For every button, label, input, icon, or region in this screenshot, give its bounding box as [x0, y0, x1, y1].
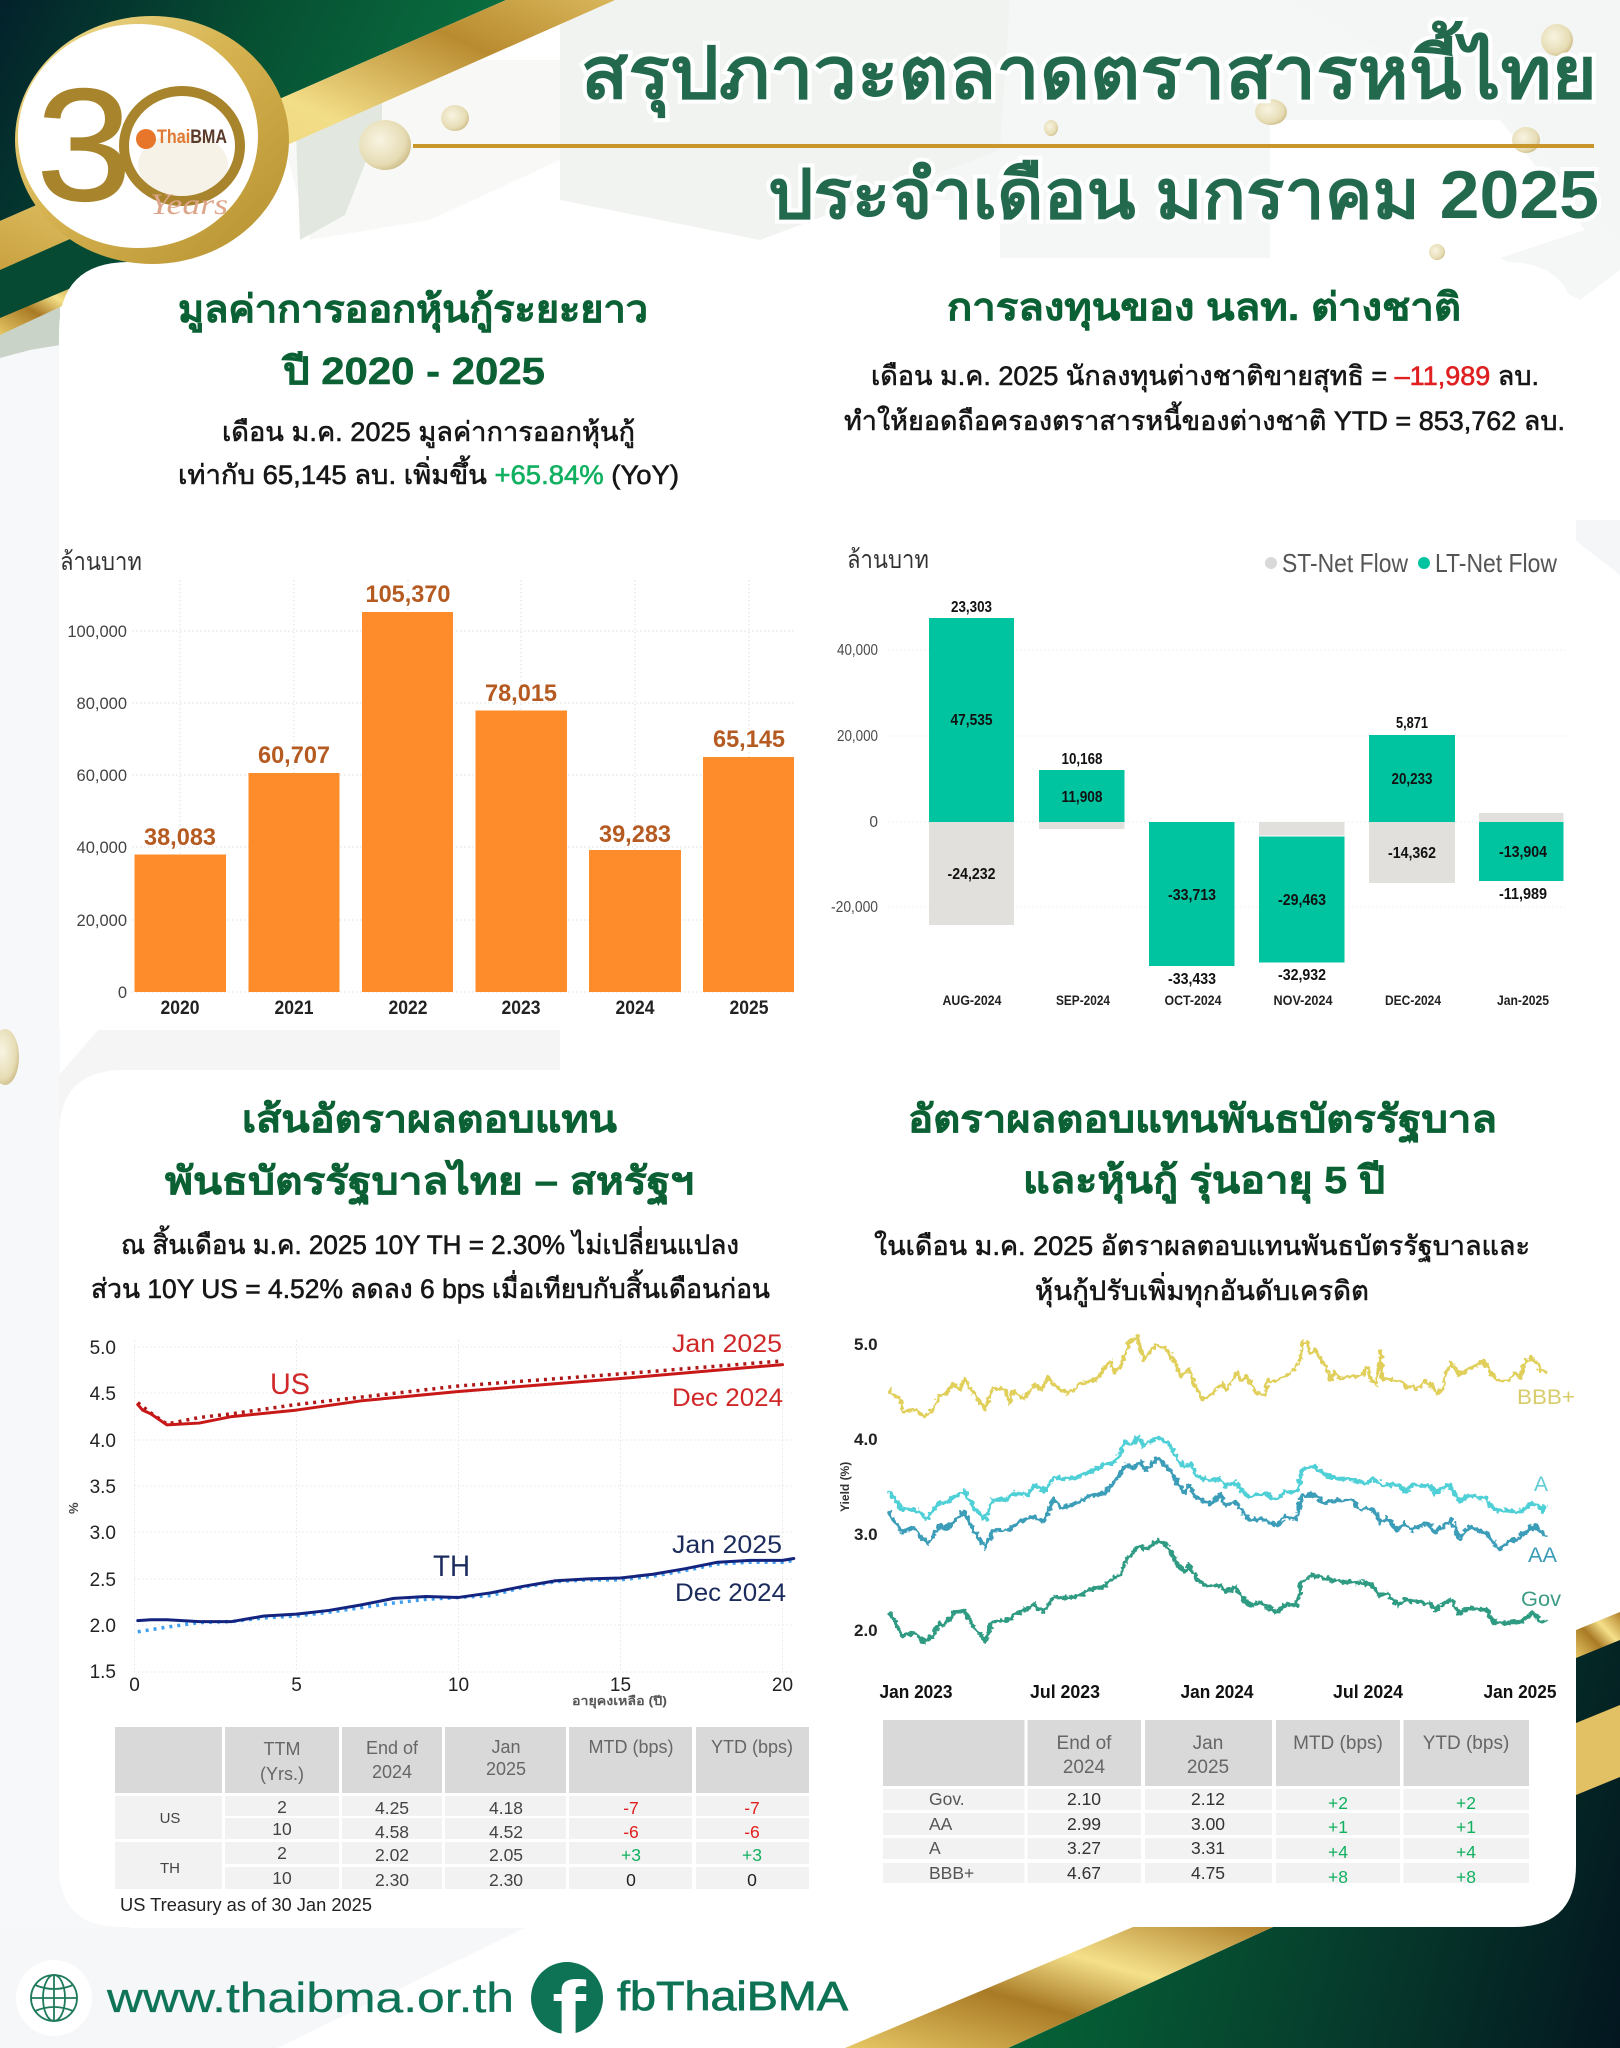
heading line 2: พันธบัตรรัฐบาลไทย – สหรัฐฯ: [165, 1159, 694, 1206]
y axis labels: 3.0: [854, 1525, 878, 1544]
x axis labels: NOV-2024: [1274, 993, 1333, 1008]
data labels: -14,362: [1388, 845, 1436, 862]
title line 1: สรุปภาวะตลาดตราสารหนี้ไทย: [581, 20, 1597, 119]
value labels: 65,145: [713, 726, 785, 753]
y axis labels: 40,000: [77, 839, 127, 857]
table rows: 2.99: [1067, 1814, 1101, 1834]
x axis labels: 2022: [388, 998, 428, 1019]
table rows: 2: [277, 1843, 287, 1863]
x axis labels: Jan-2025: [1497, 993, 1549, 1008]
corner decoration: bottom-right green and gold: [845, 1612, 1620, 2048]
y axis labels: 2.0: [90, 1616, 116, 1637]
series labels: [270, 1330, 786, 1607]
table header: YTD (bps): [711, 1737, 793, 1757]
panel: upper white card: [59, 262, 1576, 1030]
unit label: ล้านบาท: [60, 548, 142, 576]
table header: (Yrs.): [260, 1764, 304, 1784]
table header: MTD (bps): [1293, 1733, 1383, 1754]
series labels: Jan 2025: [672, 1330, 782, 1358]
table: yield curve: [115, 1727, 809, 1915]
x axis labels: [129, 1675, 793, 1696]
y axis labels: 2.0: [854, 1621, 878, 1640]
heading: มูลค่าการออกหุ้นกู้ระยะยาว: [178, 289, 648, 333]
table rows: TH: [160, 1860, 180, 1877]
heading line 2: และหุ้นกู้ รุ่นอายุ 5 ปี: [1023, 1160, 1385, 1204]
y axis labels: 1.5: [90, 1662, 116, 1683]
y axis labels: 40,000: [837, 642, 878, 659]
body line 2: ส่วน 10Y US = 4.52% ลดลง 6 bps เมื่อเทียบกับสิ้นเดือนก่อน: [91, 1269, 770, 1304]
x axis title: อายุคงเหลือ (ปี): [572, 1694, 667, 1709]
y axis labels: 4.5: [90, 1384, 116, 1405]
table rows: 4.25: [375, 1798, 409, 1818]
x axis labels: Jul 2024: [1333, 1682, 1403, 1702]
decorative gold pearls: [0, 24, 1573, 1085]
facebook handle: fbThaiBMA: [617, 1973, 849, 2019]
table rows: +3: [742, 1845, 762, 1865]
data labels: -11,989: [1499, 886, 1547, 903]
x axis labels: 5: [291, 1675, 302, 1696]
y axis labels: 3.5: [90, 1477, 116, 1498]
table rows: 2.02: [375, 1845, 409, 1865]
data labels: -24,232: [948, 866, 996, 883]
line: TH Dec 2024 dotted: [138, 1560, 794, 1632]
LT net flow bars: [929, 618, 1564, 966]
logo: ThaiBMA 30 years: 3: [36, 55, 132, 234]
heading: การลงทุนของ นลท. ต่างชาติ: [947, 287, 1461, 331]
table rows: 2: [277, 1797, 287, 1817]
x axis labels: DEC-2024: [1385, 993, 1441, 1008]
x axis labels: 2021: [274, 998, 314, 1019]
value labels: 39,283: [599, 821, 671, 848]
data labels: -29,463: [1278, 892, 1326, 909]
unit label: ล้านบาท: [847, 546, 929, 574]
table rows: [929, 1789, 1476, 1887]
table rows: -6: [744, 1822, 760, 1842]
icon: facebook: [531, 1962, 603, 2048]
x axis labels: Jan 2024: [1180, 1682, 1254, 1702]
value labels: 78,015: [485, 680, 557, 707]
y axis labels: 2.5: [90, 1570, 116, 1591]
table rows: 2.12: [1191, 1789, 1225, 1809]
table rows: 10: [272, 1868, 292, 1888]
table rows: -7: [744, 1798, 760, 1818]
line: AA: [890, 1458, 1545, 1549]
value labels: 38,083: [144, 824, 216, 851]
data labels: -13,904: [1499, 844, 1547, 861]
table note: US Treasury as of 30 Jan 2025: [120, 1895, 372, 1915]
table header: 2024: [1063, 1757, 1106, 1778]
y axis labels: [831, 642, 878, 916]
y axis labels: 20,000: [77, 912, 127, 930]
x axis labels: 2025: [730, 998, 769, 1019]
table header: TTM: [264, 1739, 300, 1759]
body line 1: ในเดือน ม.ค. 2025 อัตราผลตอบแทนพันธบัตรรัฐบาลและ: [874, 1230, 1530, 1262]
table: 5 year yields: [883, 1720, 1529, 1887]
series labels: Dec 2024: [672, 1384, 783, 1412]
table rows: [160, 1797, 762, 1890]
x axis labels: OCT-2024: [1164, 993, 1222, 1008]
x axis labels: [880, 1682, 1556, 1702]
panel: lower white card: [59, 1070, 1576, 1927]
table rows: 3.27: [1067, 1838, 1101, 1858]
series labels: A: [1534, 1473, 1548, 1496]
table rows: 10: [272, 1819, 292, 1839]
line chart: yield curve TH vs US: [66, 1330, 794, 1709]
legend: [1265, 548, 1557, 578]
table rows: 4.58: [375, 1822, 409, 1842]
y axis labels: 4.0: [90, 1431, 116, 1452]
panel: 5 year yield text: [874, 1099, 1530, 1308]
y axis labels: 4.0: [854, 1430, 878, 1449]
table header: MTD (bps): [588, 1737, 674, 1757]
table rows: BBB+: [929, 1863, 974, 1883]
table rows: 4.52: [489, 1822, 523, 1842]
table rows: 4.67: [1067, 1863, 1101, 1883]
x axis labels: 0: [129, 1675, 140, 1696]
data labels: 5,871: [1396, 715, 1428, 732]
data labels: 47,535: [950, 712, 993, 729]
stacked bar chart: foreign net flow: [831, 546, 1565, 1008]
series labels: Gov: [1521, 1588, 1562, 1611]
title: [413, 20, 1599, 233]
corner decoration: top-left green and gold: [0, 0, 615, 335]
value labels: [144, 581, 785, 851]
table rows: 3.00: [1191, 1814, 1225, 1834]
x axis labels: AUG-2024: [942, 993, 1002, 1008]
table rows: 2.30: [489, 1870, 523, 1890]
table rows: US: [160, 1810, 180, 1827]
x axis labels: 20: [772, 1675, 793, 1696]
website: www.thaibma.or.th: [106, 1974, 514, 2021]
table rows: 2.30: [375, 1870, 409, 1890]
panel: foreign investment text: [844, 287, 1565, 436]
x axis labels: 2023: [502, 998, 540, 1019]
logo: ThaiBMA 30 years: [15, 16, 289, 264]
data labels: -33,713: [1168, 887, 1216, 904]
table rows: 2.05: [489, 1845, 523, 1865]
body line 1: เดือน ม.ค. 2025 นักลงทุนต่างชาติขายสุทธิ = –11,989 ลบ.: [871, 361, 1539, 393]
data labels: 23,303: [951, 599, 992, 616]
title rule: [413, 144, 1594, 148]
table rows: 4.75: [1191, 1863, 1225, 1883]
y axis labels: 0: [869, 814, 878, 831]
series labels: TH: [433, 1550, 470, 1583]
table rows: 0: [626, 1870, 636, 1890]
table header: Jan: [491, 1737, 521, 1757]
x axis labels: [942, 993, 1549, 1008]
y axis labels: 0: [118, 984, 127, 1002]
table header: Jan: [1193, 1733, 1223, 1754]
table rows: 4.18: [489, 1798, 523, 1818]
table rows: AA: [929, 1814, 953, 1834]
y axis labels: [90, 1338, 116, 1683]
y axis labels: 80,000: [77, 695, 127, 713]
body line 2: หุ้นกู้ปรับเพิ่มทุกอันดับเครดิต: [1035, 1272, 1369, 1308]
data labels: -33,433: [1168, 971, 1216, 988]
table header: 2025: [1187, 1757, 1229, 1778]
x axis labels: 2020: [160, 998, 200, 1019]
table header: YTD (bps): [1423, 1733, 1509, 1754]
y axis labels: [854, 1335, 878, 1640]
table rows: Gov.: [929, 1789, 965, 1809]
line chart: 5 year yields: [838, 1335, 1575, 1702]
data labels: 10,168: [1062, 751, 1103, 768]
table header: [1057, 1733, 1509, 1778]
table rows: 2.10: [1067, 1789, 1101, 1809]
table rows: +8: [1328, 1867, 1348, 1887]
y axis labels: 3.0: [90, 1523, 116, 1544]
table rows: A: [929, 1838, 941, 1858]
series labels: Jan 2025: [672, 1531, 782, 1559]
heading line 1: อัตราผลตอบแทนพันธบัตรรัฐบาล: [908, 1099, 1497, 1144]
panel: yield curve text: [91, 1099, 770, 1304]
line: US Jan 2025 solid: [138, 1365, 783, 1425]
x axis labels: 10: [448, 1675, 469, 1696]
table header: 2024: [372, 1762, 412, 1782]
ST net flow bars: [929, 813, 1564, 925]
x axis labels: SEP-2024: [1056, 993, 1110, 1008]
series labels: [1517, 1386, 1575, 1611]
body line 1: ณ สิ้นเดือน ม.ค. 2025 10Y TH = 2.30% ไม่เปลี่ยนแปลง: [121, 1225, 739, 1260]
x axis labels: 2024: [616, 998, 655, 1019]
table rows: +2: [1328, 1793, 1348, 1813]
line: A: [890, 1436, 1545, 1519]
x axis labels: Jan 2023: [880, 1682, 952, 1702]
line: BBB+: [890, 1336, 1545, 1416]
line: TH Jan 2025 solid: [138, 1558, 794, 1622]
table rows: -7: [623, 1798, 639, 1818]
logo: ThaiBMA 30 years: Years: [150, 188, 228, 221]
y axis title: Yield (%): [838, 1462, 852, 1512]
x axis labels: Jul 2023: [1030, 1682, 1100, 1702]
legend: LT-Net Flow: [1435, 548, 1557, 578]
table rows: +8: [1456, 1867, 1476, 1887]
x axis labels: Jan 2025: [1484, 1682, 1556, 1702]
table rows: +4: [1328, 1842, 1348, 1862]
table rows: +4: [1456, 1842, 1476, 1862]
table rows: +2: [1456, 1793, 1476, 1813]
data labels: 20,233: [1392, 771, 1433, 788]
y axis labels: 5.0: [854, 1335, 878, 1354]
y axis labels: -20,000: [831, 899, 878, 916]
y axis labels: 5.0: [90, 1338, 116, 1359]
series labels: AA: [1528, 1544, 1557, 1567]
table header: End of: [366, 1738, 419, 1758]
body line 2: ทำให้ยอดถือครองตราสารหนี้ของต่างชาติ YTD = 853,762 ลบ.: [844, 401, 1565, 436]
table header: [260, 1737, 793, 1784]
y axis labels: [67, 623, 127, 1002]
table rows: +1: [1456, 1817, 1476, 1837]
series labels: US: [270, 1368, 310, 1401]
legend: ST-Net Flow: [1282, 548, 1408, 578]
icon: globe: [31, 1975, 77, 2021]
value labels: 105,370: [366, 581, 450, 608]
series labels: Dec 2024: [675, 1579, 786, 1607]
data labels: 11,908: [1062, 789, 1103, 806]
value labels: 60,707: [258, 742, 330, 769]
y axis labels: 100,000: [67, 623, 127, 641]
data labels: [948, 599, 1547, 988]
logo: ThaiBMA 30 years: ThaiBMA: [157, 127, 227, 148]
table header: 2025: [486, 1759, 526, 1779]
table rows: 3.31: [1191, 1838, 1225, 1858]
table rows: -6: [623, 1822, 639, 1842]
x axis labels: [160, 998, 769, 1019]
heading line 1: เส้นอัตราผลตอบแทน: [242, 1099, 617, 1141]
line: Gov: [890, 1540, 1545, 1642]
title line 2: ประจำเดือน มกราคม 2025: [768, 157, 1599, 233]
table rows: +3: [621, 1845, 641, 1865]
bars: [134, 612, 794, 992]
y axis title: %: [66, 1502, 81, 1514]
line: US Dec 2024 dotted: [138, 1361, 783, 1424]
heading year range: ปี 2020 - 2025: [281, 351, 545, 393]
panel: bond issuance text: [178, 289, 679, 490]
table header: End of: [1057, 1733, 1112, 1754]
x axis labels: 15: [610, 1675, 631, 1696]
table rows: +1: [1328, 1817, 1348, 1837]
bar chart: issuance value: [60, 548, 794, 1019]
body line 1: เดือน ม.ค. 2025 มูลค่าการออกหุ้นกู้: [222, 417, 635, 449]
data labels: -32,932: [1278, 967, 1326, 984]
table rows: 0: [747, 1870, 757, 1890]
series labels: BBB+: [1517, 1386, 1575, 1409]
body line 2: เท่ากับ 65,145 ลบ. เพิ่มขึ้น +65.84% (YoY): [178, 455, 679, 490]
y axis labels: 20,000: [837, 728, 878, 745]
footer: [31, 1962, 849, 2048]
y axis labels: 60,000: [77, 767, 127, 785]
